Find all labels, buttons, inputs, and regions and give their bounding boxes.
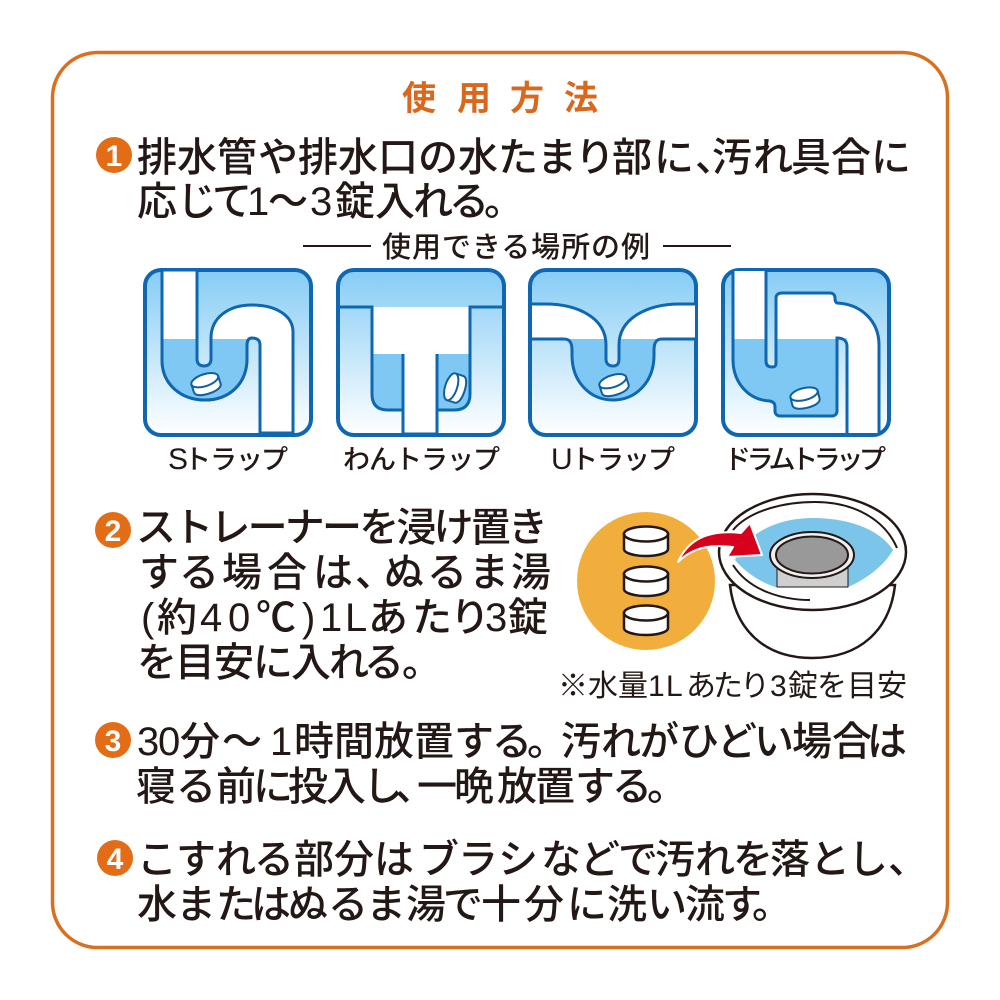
step 4 text xyxy=(97,838,928,927)
subheading: usage examples: 使用できる場所の例 xyxy=(382,231,650,264)
number badge 2 xyxy=(95,512,131,548)
number badge 1 xyxy=(96,137,132,173)
step 2 text xyxy=(95,506,551,685)
number badge 2: 2 xyxy=(105,515,121,548)
step 2 line 3: (約40℃) 1Lあたり3錠 xyxy=(141,596,548,640)
tablet xyxy=(789,385,821,411)
icon: U trap xyxy=(530,270,696,435)
number badge 3 xyxy=(95,722,131,758)
number badge 4 xyxy=(97,840,133,876)
arrow xyxy=(678,523,762,562)
step 3 text xyxy=(95,720,907,809)
number badge 1: 1 xyxy=(106,140,122,173)
label: S trap: トラップ xyxy=(184,445,288,475)
icon: bowl trap xyxy=(338,270,504,435)
icon: S trap xyxy=(145,270,311,435)
title: 使用方法 xyxy=(402,80,598,118)
bowl xyxy=(719,494,906,658)
label: U trap: トラップ xyxy=(571,445,675,475)
tablet xyxy=(190,370,222,398)
caption: ※水量1Lあたり3錠を目安 xyxy=(558,670,907,703)
number badge 4: 4 xyxy=(107,843,124,876)
step 1 line 1: 排水管や排水口の水たまり部に、汚れ具合に xyxy=(137,136,911,180)
step 3 line 1: 30分〜1時間放置する。汚れがひどい場合は xyxy=(137,720,907,764)
label: S trap: S xyxy=(168,443,188,476)
icon: drum trap xyxy=(723,270,889,435)
orange circle with tablets xyxy=(577,512,715,650)
step 1 line 2: 応じて1〜3錠入れる。 xyxy=(137,180,524,224)
label: U trap: U xyxy=(551,443,573,476)
step 2 line 2: する場合は、ぬるま湯 xyxy=(139,551,551,595)
step 2 line 1: ストレーナーを浸け置き xyxy=(136,506,548,550)
step 4 line 2: 水またはぬるま湯で十分に洗い流す。 xyxy=(137,883,792,927)
step 2 line 4: を目安に入れる。 xyxy=(137,641,442,685)
step 4 line 1: こすれる部分はブラシなどで汚れを落とし、 xyxy=(137,838,928,882)
step 3 line 2: 寝る前に投入し、一晩放置する。 xyxy=(136,765,687,809)
tablet xyxy=(441,372,469,404)
label: drum trap: ドラムトラップ xyxy=(724,445,886,475)
number badge 3: 3 xyxy=(105,725,121,758)
label: bowl trap: わんトラップ xyxy=(343,445,500,475)
step 1 text xyxy=(96,136,911,224)
tablet xyxy=(598,371,630,399)
illustration: tablets into bowl xyxy=(577,494,906,658)
